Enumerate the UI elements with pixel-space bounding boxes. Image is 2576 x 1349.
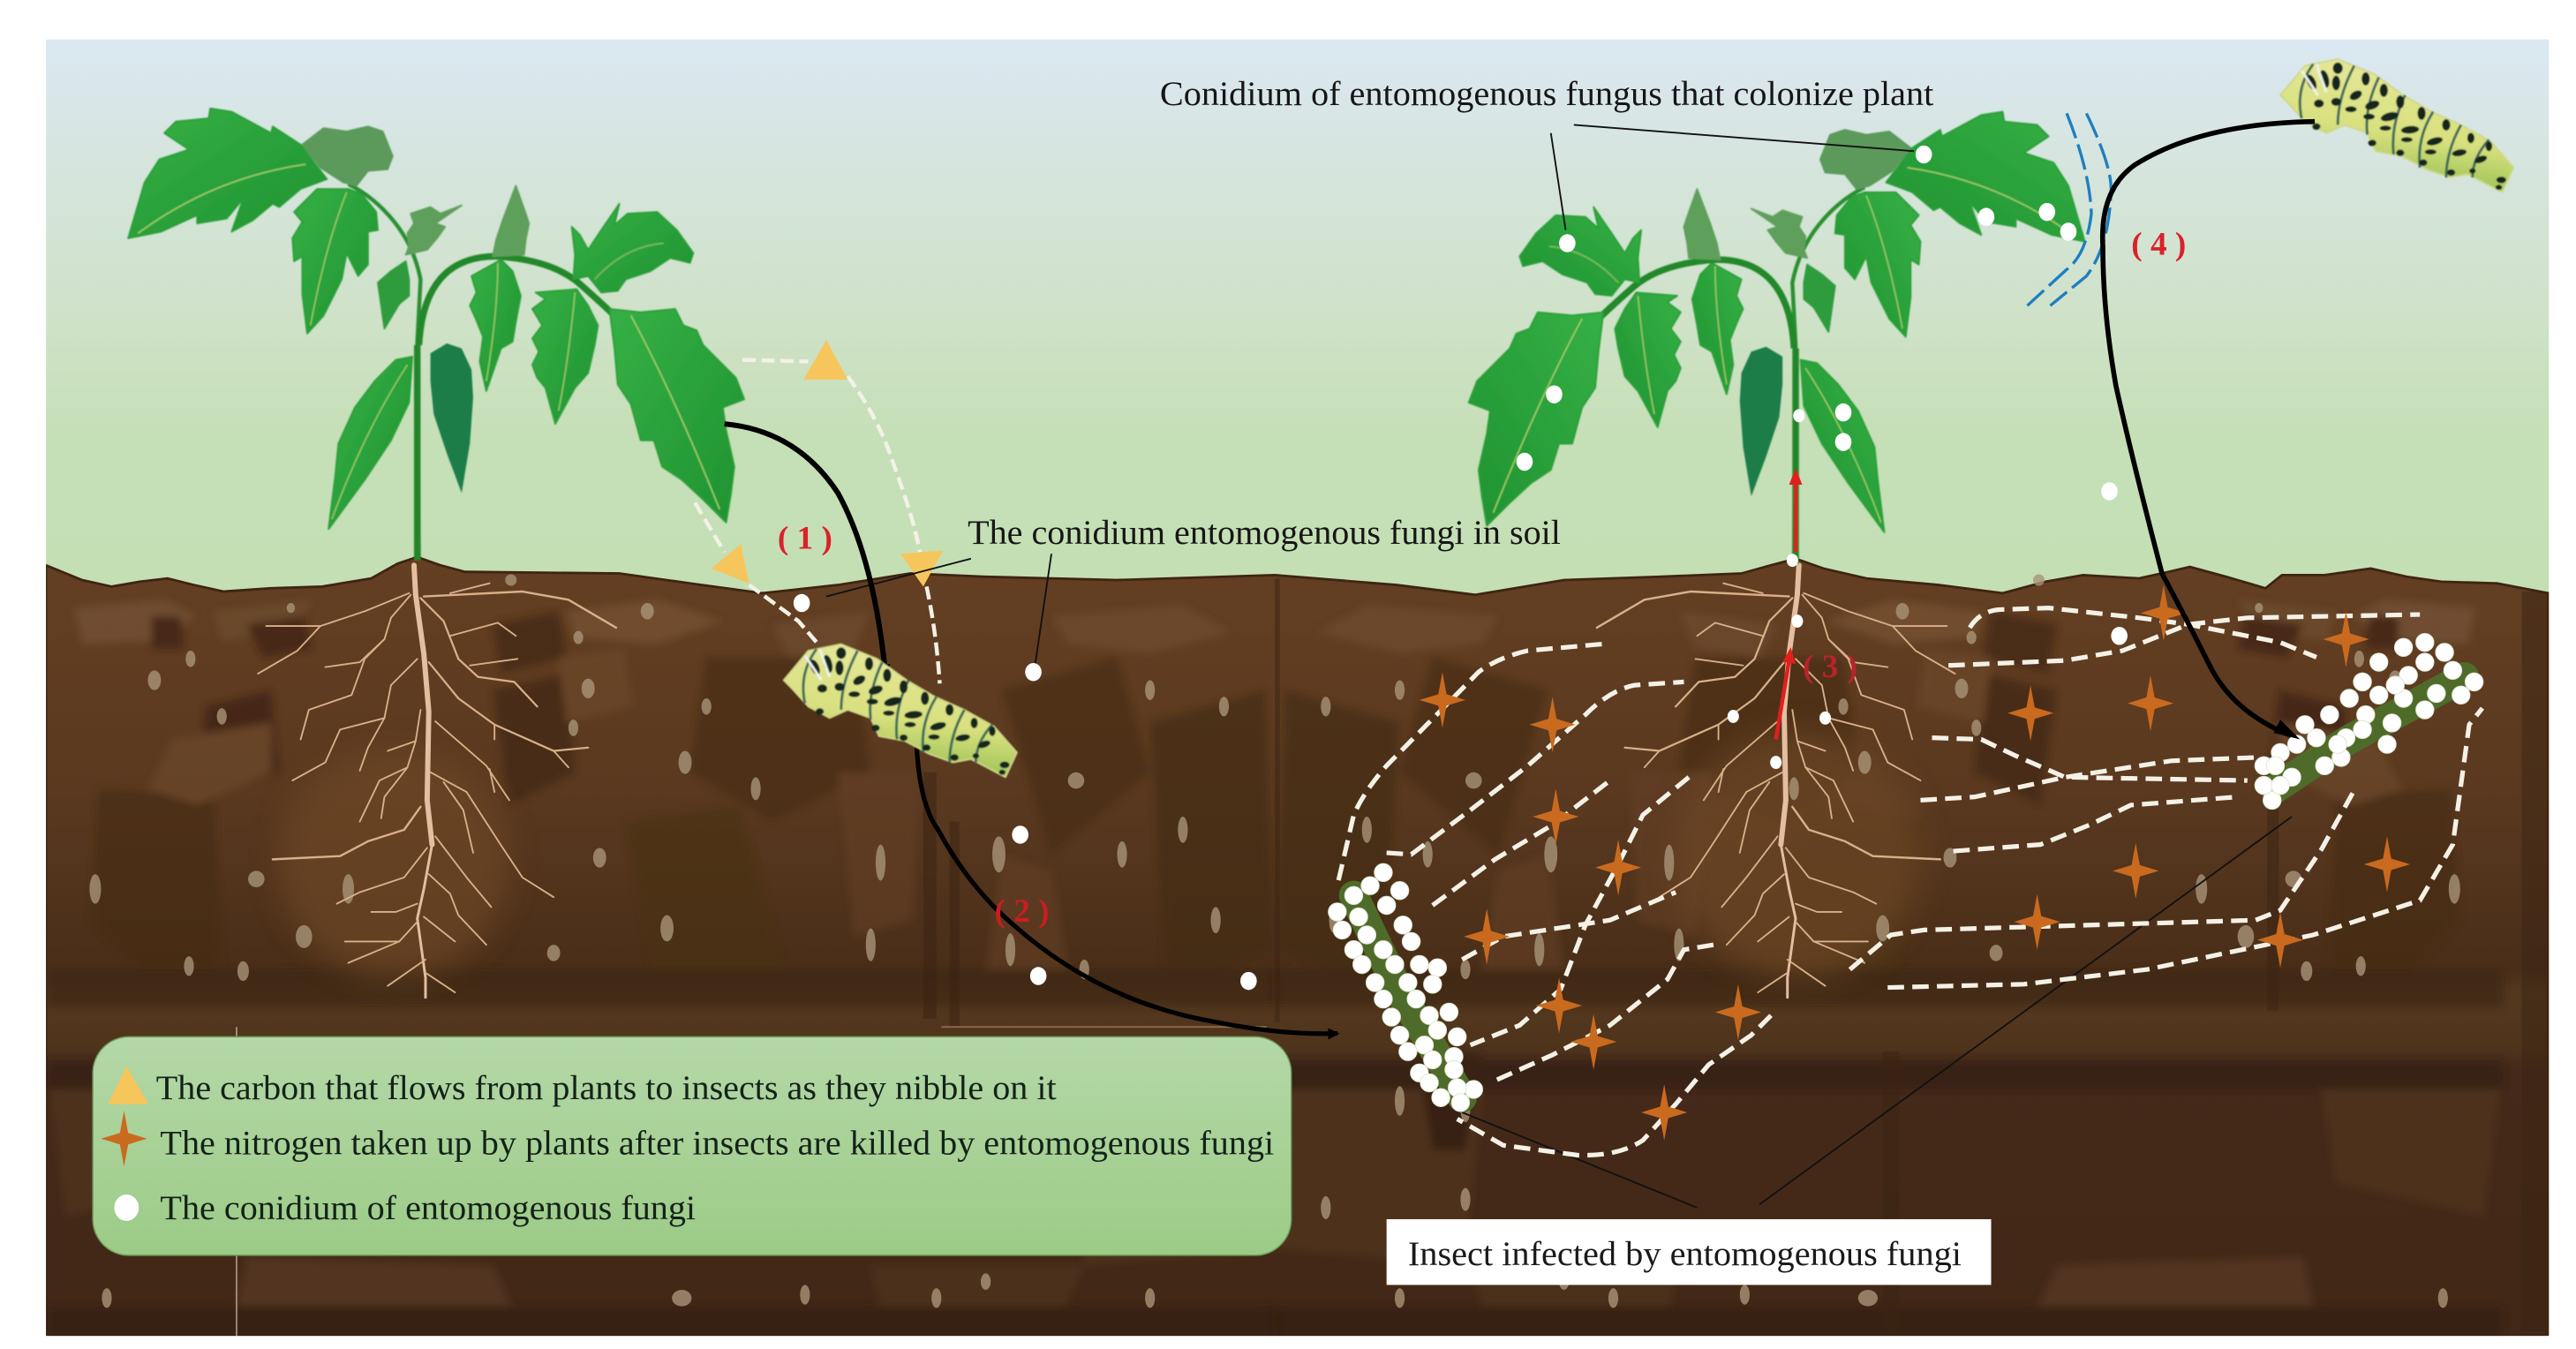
carbon flow: dashed paths with triangles: [695, 340, 943, 683]
panel: sky background: [46, 40, 2549, 598]
arrow: (1) plant to insect: [725, 424, 885, 674]
callout lines: [826, 124, 2292, 1208]
arrowhead: infected insect end of (4): [2274, 720, 2300, 740]
label: colonizing conidium: Conidium of entomogenous fungus that colonize plant: [1160, 75, 1934, 113]
icon: caterpillar on soil: [784, 644, 1017, 777]
icon: right plant roots: [1597, 565, 1955, 998]
legend icon: carbon triangle: [108, 1066, 148, 1104]
step label (4): ( 4 ): [2131, 226, 2186, 262]
arrow: (3) red arrows up the root and stem: [1776, 468, 1802, 740]
arrow: (2) insect to infection: [916, 748, 1337, 1034]
legend text: nitrogen: The nitrogen taken up by plants after insects are killed by entomogenous fungi: [160, 1124, 1274, 1162]
icon: right plant: [1469, 112, 2085, 563]
icon: infected insect, lower left: [1329, 863, 1483, 1112]
label: conidium in soil: The conidium entomogenous fungi in soil: [968, 514, 1561, 552]
nitrogen stars: [1420, 585, 2410, 1141]
icon: left plant roots: [258, 565, 616, 998]
conidia dots: [794, 146, 2128, 990]
panel: soil cross-section: [46, 557, 2548, 1336]
legend icon: nitrogen star: [101, 1111, 147, 1166]
legend text: carbon: The carbon that flows from plants to insects as they nibble on it: [156, 1069, 1057, 1107]
callout: insect infected label: Insect infected by entomogenous fungi: [1408, 1235, 1962, 1273]
step label (2): ( 2 ): [995, 893, 1050, 930]
callout: insect infected label: [1387, 1219, 1991, 1285]
step label (3): ( 3 ): [1803, 649, 1857, 685]
legend text: conidium: The conidium of entomogenous fungi: [160, 1189, 696, 1227]
icon: left plant: [128, 109, 744, 561]
nitrogen flow: white dashed paths: [1337, 608, 2482, 1156]
legend icon: conidium dot: [114, 1195, 139, 1221]
arrow: (4) infected insect to plant and caterpillar: [2103, 122, 2315, 738]
panel: legend: [93, 1036, 1292, 1255]
icon: caterpillar at top right: [2280, 59, 2513, 192]
icon: infected insect, right: [2255, 633, 2483, 810]
icon: blue dashed air arcs: [2027, 113, 2111, 305]
step label (1): ( 1 ): [778, 521, 832, 557]
